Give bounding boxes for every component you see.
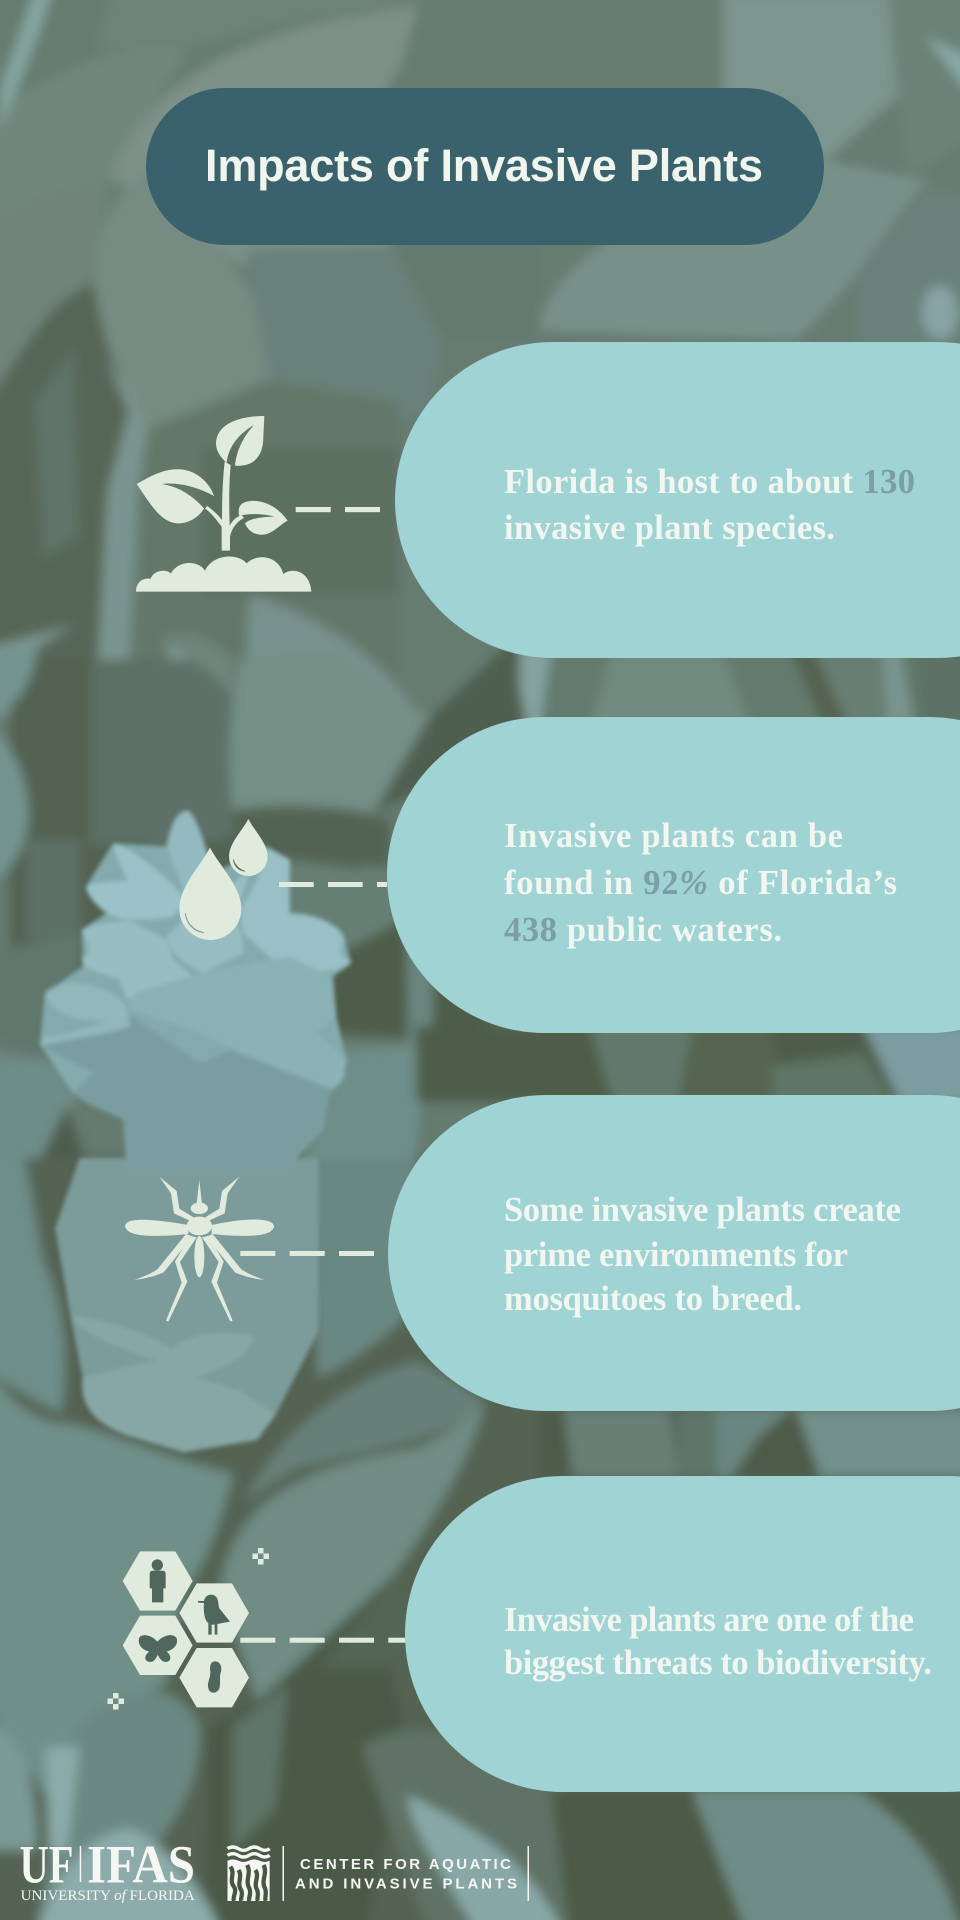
- panel 4 text: biggest threats to biodiversity.: [504, 1644, 932, 1682]
- panel 4 text: Invasive plants are one of the: [504, 1601, 914, 1639]
- logo: UF IFAS University of Florida: UNIVERSITY of FLORIDA: [21, 1888, 195, 1904]
- panel 3 text: prime environments for: [504, 1236, 848, 1274]
- panel 1 text: [504, 463, 915, 547]
- hexagon: person: [123, 1551, 193, 1611]
- logo: UF IFAS University of Florida: [20, 1834, 195, 1904]
- middle area: [0, 633, 520, 1173]
- icon: water drops: [179, 819, 268, 940]
- sparkle: upper: [252, 1548, 269, 1564]
- panel: mosquitoes: [388, 1095, 960, 1411]
- lower area: [0, 1158, 960, 1920]
- panel 2 text: Invasive plants can be: [504, 817, 843, 855]
- hexagon: bird: [179, 1583, 249, 1643]
- panel 3 text: [504, 1191, 901, 1318]
- panel: public waters: [387, 717, 960, 1033]
- panel 3 text: Some invasive plants create: [504, 1191, 901, 1229]
- panel 1 text: invasive plant species.: [504, 509, 835, 547]
- logo: UF IFAS University of Florida: IFAS: [87, 1834, 195, 1894]
- panel 2 text: 438 public waters.: [504, 911, 782, 949]
- panel 2 text: found in 92% of Florida’s: [504, 864, 897, 902]
- sparkle: lower: [108, 1693, 124, 1710]
- hexagon: butterfly: [123, 1616, 193, 1675]
- icon: mosquito: [125, 1177, 274, 1322]
- logo: Center for Aquatic and Invasive Plants: [282, 1846, 529, 1901]
- title pill: [146, 88, 824, 245]
- panel 2 text: [504, 817, 897, 949]
- title text: Impacts of Invasive Plants: [205, 140, 763, 191]
- dashed connector: biodiversity: [240, 1638, 405, 1643]
- dashed connector: water: [279, 882, 387, 887]
- logo: Center for Aquatic and Invasive Plants: CENTER FOR AQUATIC: [300, 1856, 511, 1873]
- panel 3 text: mosquitoes to breed.: [504, 1280, 802, 1318]
- icon: sprouting plant: [136, 416, 311, 592]
- logo: Center for Aquatic and Invasive Plants: AND INVASIVE PLANTS: [295, 1875, 517, 1892]
- panel 4 text: [504, 1601, 932, 1682]
- logo: water and plant mark: [227, 1847, 270, 1901]
- hexagon: footprint: [179, 1648, 249, 1707]
- icon: biodiversity hexagons: [123, 1551, 249, 1707]
- panel: biodiversity: [405, 1476, 960, 1792]
- band between panels 1 and 2: [490, 649, 960, 735]
- dashed connector: mosquito: [240, 1251, 374, 1256]
- flower: upper cluster: [40, 811, 351, 1173]
- flower: lower silhouette: [55, 1158, 318, 1452]
- band between panels 2 and 3: [416, 1026, 960, 1102]
- logo: UF IFAS University of Florida: UF: [20, 1834, 74, 1894]
- panel 1 text: Florida is host to about 130: [504, 463, 915, 501]
- upper area: [0, 0, 960, 714]
- panel: species count: [395, 342, 960, 658]
- dashed connector: plant: [296, 507, 380, 512]
